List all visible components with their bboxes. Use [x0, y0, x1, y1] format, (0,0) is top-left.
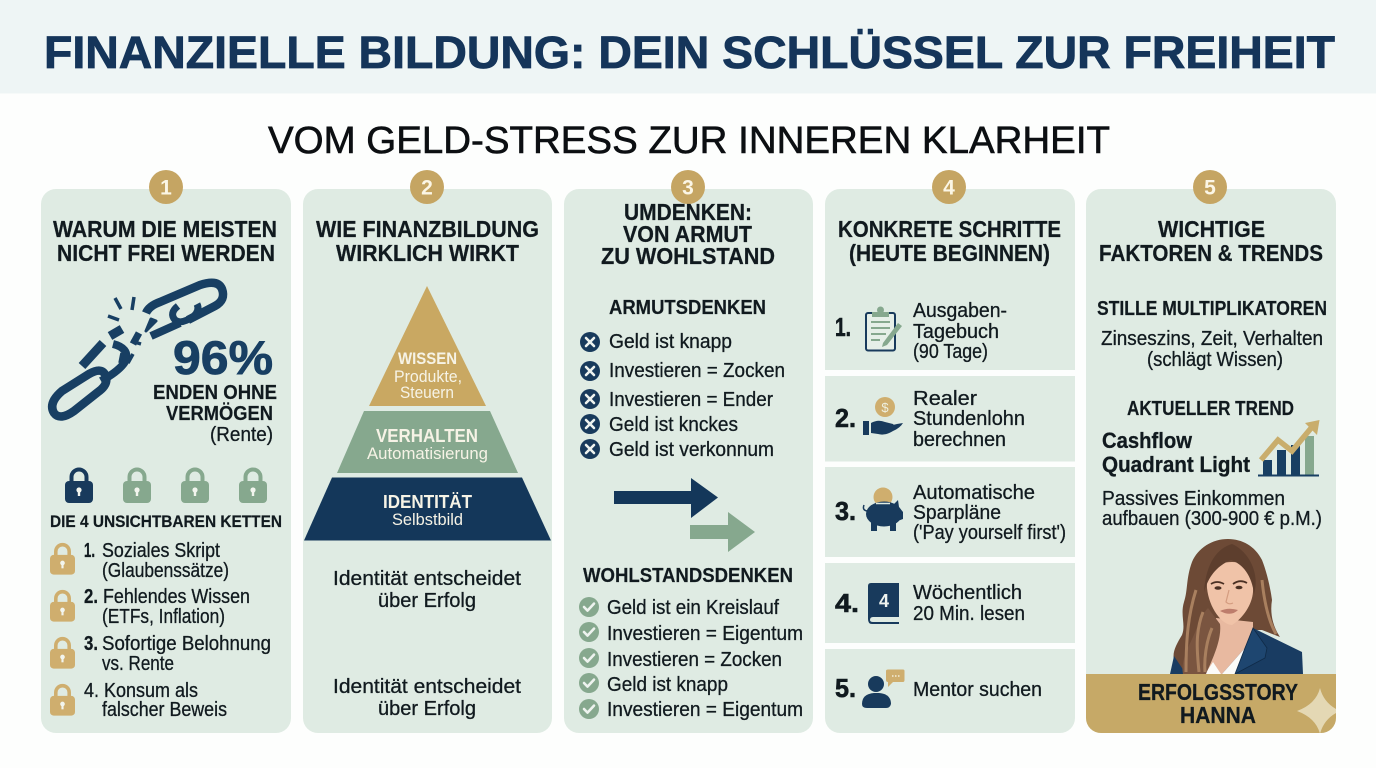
- pyramid chart: [304, 286, 551, 540]
- text block: zinseszins: (schlägt Wissen): [1147, 348, 1283, 371]
- chain 2: (ETFs, Inflation): [102, 605, 225, 628]
- list: armutsdenken: Investieren = Ender: [609, 388, 773, 411]
- list: armutsdenken: Geld ist knapp: [609, 330, 732, 353]
- banner: erfolgsstory hanna: HANNA: [1180, 702, 1256, 728]
- icon: book: [868, 583, 899, 624]
- panel 3: umdenken: [564, 170, 813, 733]
- statistic caption: VERMÖGEN: [166, 402, 273, 425]
- heading: WICHTIGE: [1158, 216, 1265, 242]
- heading: [1099, 216, 1323, 266]
- heading: [838, 216, 1061, 266]
- subtitle: VOM GELD-STRESS ZUR INNEREN KLARHEIT: [268, 120, 1110, 162]
- pyramid tier: wissen: Steuern: [400, 384, 454, 402]
- number badge 2: 2: [421, 176, 433, 200]
- text block: cashflow quadrant light: [1102, 428, 1251, 477]
- text block: passives einkommen: Passives Einkommen: [1102, 487, 1285, 510]
- icon: hand with coin: [863, 397, 903, 435]
- chain 1: (Glaubenssätze): [102, 559, 229, 582]
- icons: four locks: [65, 470, 267, 503]
- heading: VON ARMUT: [623, 221, 752, 247]
- text block: passives einkommen: [1102, 487, 1322, 530]
- heading: (HEUTE BEGINNEN): [849, 240, 1050, 266]
- pyramid tier: verhalten: [337, 411, 518, 473]
- icon: book: 4: [879, 591, 889, 611]
- icon: growth chart: [1258, 420, 1320, 476]
- list: wohlstandsdenken: [579, 596, 803, 721]
- heading: WARUM DIE MEISTEN: [53, 216, 277, 242]
- step 3: automatische sparplaene: Automatische: [913, 481, 1035, 504]
- step 4: woechentlich lesen: 4.: [835, 588, 859, 618]
- number badge 3: [671, 170, 705, 204]
- chain 2: 2.: [84, 585, 98, 608]
- text block: cashflow quadrant light: Cashflow: [1102, 428, 1193, 453]
- heading: WIE FINANZBILDUNG: [316, 216, 539, 242]
- step 4: woechentlich lesen: Wöchentlich: [913, 581, 1022, 604]
- number badge 5: [1193, 170, 1227, 204]
- step 2: realer stundenlohn: Stundenlohn: [913, 407, 1025, 430]
- step 1: ausgaben-tagebuch: 1.: [835, 312, 851, 342]
- chain 1: Soziales Skript: [102, 539, 220, 562]
- step 3: automatische sparplaene: 3.: [835, 496, 856, 526]
- number badge 4: [932, 170, 966, 204]
- icon: piggy bank: [863, 488, 903, 531]
- title: FINANZIELLE BILDUNG: DEIN SCHLÜSSEL ZUR FREIHEIT: [44, 27, 1335, 78]
- heading: KONKRETE SCHRITTE: [838, 216, 1061, 242]
- text block: identitaet entscheidet 1: über Erfolg: [378, 589, 476, 612]
- chain 3: vs. Rente: [102, 652, 174, 675]
- subheading: wohlstandsdenken: WOHLSTANDSDENKEN: [583, 565, 793, 587]
- step 3: automatische sparplaene: Sparpläne: [913, 501, 1001, 524]
- text block: identitaet entscheidet 2: über Erfolg: [378, 697, 476, 720]
- chain 1: [50, 539, 229, 582]
- subheading: aktueller trend: AKTUELLER TREND: [1127, 398, 1294, 420]
- text block: zinseszins: [1101, 327, 1323, 371]
- arrow: navy: [614, 478, 718, 518]
- list: armutsdenken: Investieren = Zocken: [609, 359, 785, 382]
- step 5: mentor suchen: [835, 670, 1042, 708]
- pyramid tier: identitaet: Selbstbild: [392, 511, 463, 529]
- chain 2: Fehlendes Wissen: [103, 585, 250, 608]
- pyramid tier: wissen: Produkte,: [394, 368, 462, 386]
- pyramid tier: wissen: [369, 286, 486, 406]
- icon: hand with coin: $: [881, 400, 889, 415]
- step 5: mentor suchen: 5.: [835, 673, 856, 703]
- step 1: ausgaben-tagebuch: Ausgaben-: [913, 299, 1007, 322]
- heading: ZU WOHLSTAND: [601, 243, 775, 269]
- list: armutsdenken: Geld ist verkonnum: [609, 438, 774, 461]
- subheading: die 4 unsichtbaren ketten: DIE 4 UNSICHTBAREN KETTEN: [50, 512, 282, 531]
- pyramid tier: identitaet: [304, 478, 551, 540]
- panel 4: konkrete schritte: [825, 170, 1075, 733]
- statistic caption: [153, 382, 277, 446]
- step 5: mentor suchen: Mentor suchen: [913, 678, 1042, 701]
- list: armutsdenken: [580, 330, 785, 461]
- illustration: portrait of hanna: [1170, 539, 1303, 674]
- step 2: realer stundenlohn: Realer: [913, 387, 977, 410]
- chain 4: [50, 679, 227, 721]
- statistic caption: ENDEN OHNE: [153, 382, 277, 404]
- chain 4: 4. Konsum als: [84, 679, 198, 702]
- list: wohlstandsdenken: Geld ist ein Kreislauf: [607, 596, 779, 619]
- text block: zinseszins: Zinseszins, Zeit, Verhalten: [1101, 327, 1323, 350]
- icon: broken chain: [52, 283, 223, 417]
- text block: identitaet entscheidet 2: Identität entscheidet: [333, 675, 521, 698]
- pyramid tier: identitaet: IDENTITÄT: [383, 492, 472, 512]
- icon: clipboard: [866, 306, 902, 350]
- chain 3: Sofortige Belohnung: [102, 632, 271, 655]
- list: wohlstandsdenken: Investieren = Eigentum: [607, 622, 803, 645]
- text block: cashflow quadrant light: Quadrant Light: [1102, 452, 1251, 477]
- subheading: stille multiplikatoren: STILLE MULTIPLIKATOREN: [1097, 298, 1327, 320]
- header band: [0, 0, 1376, 94]
- chain 3: 3.: [84, 632, 98, 655]
- statistic: 96%: 96%: [173, 331, 273, 384]
- heading: NICHT FREI WERDEN: [57, 240, 275, 266]
- heading: [601, 199, 775, 269]
- number badge 2: [410, 170, 444, 204]
- panel 1: warum die meisten nicht frei werden: [41, 170, 291, 733]
- step 2: realer stundenlohn: [835, 387, 1025, 451]
- chain 1: 1.: [84, 539, 95, 562]
- number badge 3: 3: [682, 176, 694, 200]
- statistic caption: (Rente): [210, 423, 273, 446]
- number badge 5: 5: [1204, 176, 1216, 200]
- panel 5: wichtige faktoren und trends: [1086, 170, 1340, 734]
- text block: passives einkommen: aufbauen (300-900 € p.M.): [1102, 507, 1322, 530]
- panel 2: wie finanzbildung wirklich wirkt: [303, 170, 552, 733]
- number badge 4: 4: [943, 176, 955, 200]
- step 4: woechentlich lesen: 20 Min. lesen: [913, 602, 1025, 625]
- pyramid tier: verhalten: Automatisierung: [367, 445, 488, 463]
- heading: [53, 216, 277, 266]
- list: wohlstandsdenken: Geld ist knapp: [607, 673, 728, 696]
- heading: UMDENKEN:: [624, 199, 752, 225]
- decorative sparkle: [1297, 688, 1336, 733]
- list: armutsdenken: Geld ist knckes: [609, 413, 738, 436]
- step 3: automatische sparplaene: ('Pay yourself first'): [913, 521, 1066, 544]
- number badge 1: 1: [160, 176, 172, 200]
- list: wohlstandsdenken: Investieren = Zocken: [607, 648, 782, 671]
- step 4: woechentlich lesen: [835, 581, 1025, 625]
- icon: person with speech bubble: [862, 670, 904, 708]
- banner: erfolgsstory hanna: ERFOLGSSTORY: [1138, 679, 1298, 705]
- pyramid tier: verhalten: VERHALTEN: [376, 426, 478, 446]
- pyramid tier: wissen: WISSEN: [398, 349, 457, 368]
- text block: identitaet entscheidet 2: [333, 675, 521, 720]
- arrow: green: [690, 512, 755, 552]
- step 1: ausgaben-tagebuch: Tagebuch: [913, 320, 999, 343]
- heading: FAKTOREN & TRENDS: [1099, 240, 1323, 266]
- chain 3: [50, 632, 271, 675]
- chain 2: [50, 585, 250, 628]
- heading: [316, 216, 539, 266]
- step 1: ausgaben-tagebuch: [835, 299, 1007, 363]
- heading: WIRKLICH WIRKT: [336, 240, 519, 266]
- text block: identitaet entscheidet 1: Identität entscheidet: [333, 567, 521, 590]
- step 2: realer stundenlohn: 2.: [835, 403, 856, 433]
- banner: erfolgsstory hanna: [1086, 674, 1340, 734]
- number badge 1: [149, 170, 183, 204]
- step 2: realer stundenlohn: berechnen: [913, 428, 1006, 451]
- step 3: automatische sparplaene: [835, 481, 1066, 544]
- text block: identitaet entscheidet 1: [333, 567, 521, 612]
- list: wohlstandsdenken: Investieren = Eigentum: [607, 698, 803, 721]
- subheading: armutsdenken: ARMUTSDENKEN: [609, 297, 766, 319]
- step 1: ausgaben-tagebuch: (90 Tage): [913, 340, 988, 363]
- chain 4: falscher Beweis: [102, 698, 227, 721]
